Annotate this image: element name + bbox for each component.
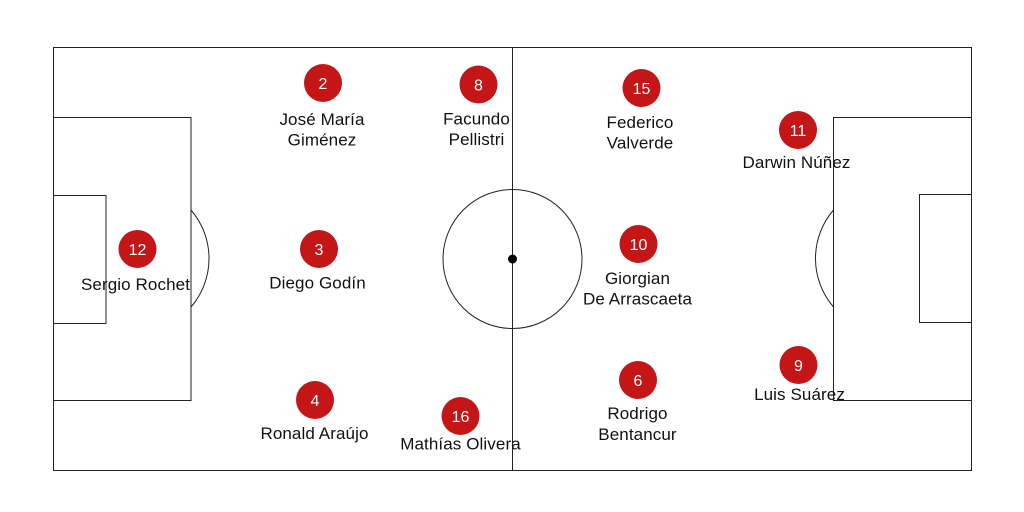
player 4 Ronald Araújo (260, 381, 369, 443)
player 12 Sergio Rochet (81, 230, 190, 294)
football pitch lines (54, 47, 972, 471)
player 12 Sergio Rochet: 12 (129, 242, 146, 259)
player 9 Luis Suárez: Luis Suárez (754, 385, 845, 404)
player 3 Diego Godín: 3 (315, 242, 324, 259)
centre spot (508, 254, 517, 264)
player 2 José María Giménez: José María (279, 110, 365, 129)
player 4 Ronald Araújo: 4 (311, 393, 320, 410)
player 8 Facundo Pellistri (443, 66, 510, 149)
player 6 Rodrigo Bentancur: Rodrigo (607, 404, 668, 423)
player 12 Sergio Rochet: Sergio Rochet (81, 275, 190, 294)
player 8 Facundo Pellistri: Pellistri (449, 130, 504, 149)
player 10 Giorgian De Arrascaeta: De Arrascaeta (583, 290, 692, 308)
player 6 Rodrigo Bentancur: Bentancur (598, 425, 677, 444)
player 16 Mathías Olivera (400, 397, 521, 454)
player 3 Diego Godín (269, 230, 366, 292)
player 10 Giorgian De Arrascaeta (583, 225, 692, 308)
player 15 Federico Valverde: 15 (633, 81, 650, 98)
player 10 Giorgian De Arrascaeta: Giorgian (605, 269, 670, 288)
player 3 Diego Godín: Diego Godín (269, 274, 366, 292)
player 11 Darwin Núñez: Darwin Núñez (743, 153, 850, 172)
player 2 José María Giménez: 2 (319, 76, 328, 93)
player 10 Giorgian De Arrascaeta: 10 (630, 237, 648, 254)
player 4 Ronald Araújo: Ronald Araújo (260, 424, 369, 443)
player 9 Luis Suárez: 9 (794, 358, 803, 375)
player 15 Federico Valverde: Valverde (607, 134, 673, 152)
player 9 Luis Suárez (754, 346, 845, 404)
player 6 Rodrigo Bentancur: 6 (634, 373, 643, 390)
player 16 Mathías Olivera: Mathías Olivera (400, 434, 521, 454)
player 8 Facundo Pellistri: Facundo (443, 110, 510, 128)
player 6 Rodrigo Bentancur (598, 361, 677, 444)
player 15 Federico Valverde: Federico (607, 113, 673, 132)
player 8 Facundo Pellistri: 8 (474, 77, 483, 94)
player 2 José María Giménez (279, 64, 365, 150)
player 2 José María Giménez: Giménez (288, 130, 356, 150)
player 16 Mathías Olivera: 16 (452, 409, 470, 426)
player 11 Darwin Núñez: 11 (790, 123, 806, 140)
player 15 Federico Valverde (607, 69, 673, 152)
player 11 Darwin Núñez (743, 111, 850, 172)
